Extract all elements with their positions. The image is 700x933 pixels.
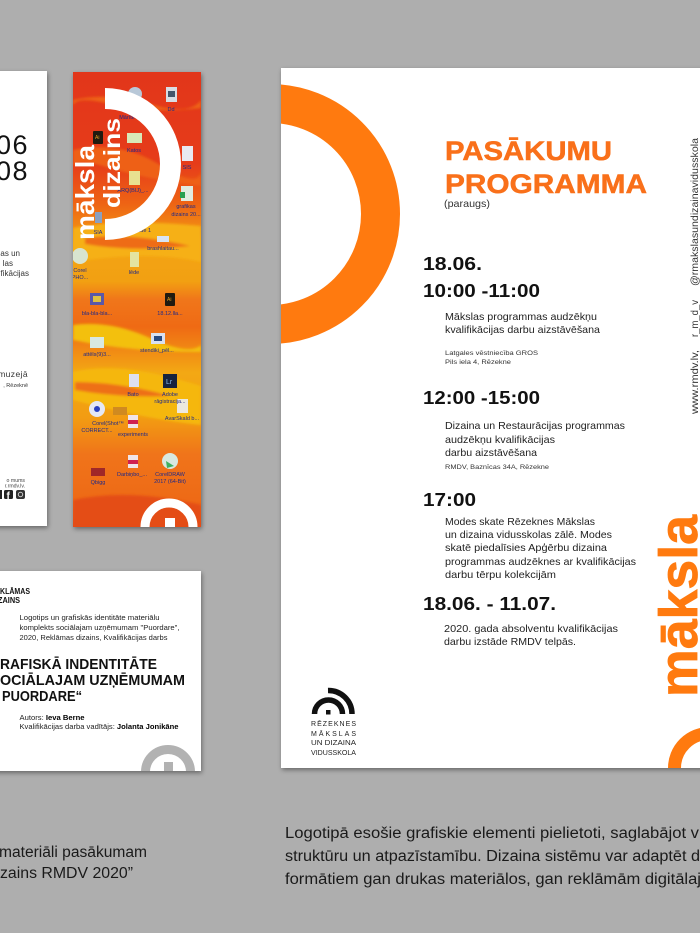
- description fragment: fikācijas: [1, 269, 29, 278]
- panel: event programme poster: [280, 68, 700, 772]
- first venue: [446, 350, 538, 365]
- third event: [445, 516, 636, 581]
- second event: darbu aizstāvēšana: [445, 447, 537, 459]
- first event: [446, 312, 600, 335]
- desktop icon labels: AvarSkald b...: [165, 416, 200, 422]
- panel: grey thesis card: [0, 571, 201, 794]
- logo text: MĀKSLAS: [311, 730, 356, 738]
- desktop icon labels: 18.12.lla...: [157, 311, 183, 317]
- exhibition dates: 18.06. - 11.07.: [423, 594, 556, 614]
- wordmark: māksla dizains: [75, 119, 120, 238]
- date and first time: [424, 257, 540, 297]
- title: [446, 137, 647, 194]
- date and first time: 18.06.: [423, 254, 482, 274]
- contact fragment: o mums: [7, 478, 25, 484]
- work description: 2020, Reklāmas dizains, Kvalifikācijas darbs: [20, 633, 168, 642]
- desktop icons: [72, 87, 193, 476]
- description fragment: [0, 249, 29, 278]
- third time: 17:00: [423, 490, 476, 510]
- date and first time: 10:00 -11:00: [423, 281, 540, 301]
- panel: left poster card: [0, 71, 47, 526]
- desktop icons: Ai: [167, 297, 171, 303]
- desktop icon labels: Darbiņbo_...: [117, 472, 147, 478]
- logo text: UN DIZAINA: [311, 740, 356, 747]
- icon: bottom ring: [140, 498, 198, 527]
- desktop icon labels: 2017 (64-Bit): [154, 479, 186, 485]
- desktop icon labels: CORRECT...: [81, 428, 113, 434]
- caption: logo usage: Logotipā esošie grafiskie elementi pielietoti, saglabājot v: [285, 825, 699, 842]
- second event: [445, 422, 625, 456]
- second venue: RMDV, Baznīcas 34A, Rēzekne: [445, 464, 549, 471]
- desktop icon labels: Katos: [127, 148, 141, 154]
- desktop icon labels: Qbigg: [91, 480, 105, 486]
- credits: Kvalifikācijas darba vadītājs: Jolanta Jonikāne: [20, 722, 178, 731]
- desktop icon labels: stendiki_pēl...: [140, 348, 174, 354]
- desktop icon labels: bla-bla-bla...: [82, 311, 113, 317]
- desktop icon labels: dizains 20...: [171, 212, 201, 218]
- first event: kvalifikācijas darbu aizstāvēšana: [445, 324, 600, 336]
- icon: social media: f: [6, 491, 10, 502]
- vertical contact line: [690, 138, 700, 414]
- contact fragment: [5, 478, 25, 490]
- desktop icon labels: CorelDRAW: [155, 472, 186, 478]
- white half ring: [105, 88, 181, 240]
- wordmark: māksla dizains: dizains: [99, 118, 125, 208]
- exhibition text: [444, 623, 618, 648]
- credits: [20, 715, 178, 730]
- work title: [0, 656, 185, 705]
- desktop icon labels: Bato: [127, 392, 139, 398]
- dates: [0, 130, 29, 186]
- venue fragment: [0, 369, 28, 389]
- desktop icon labels: PHO...: [72, 275, 89, 281]
- icon: logo arcs: [314, 690, 352, 714]
- desktop icon labels: Corel(Shot™: [92, 421, 124, 427]
- caption: logo usage: formātiem gan drukas materiālos, gan reklāmām digitālaj: [285, 871, 700, 888]
- title: PASĀKUMU: [445, 136, 612, 166]
- desktop icon labels: grafikas: [176, 204, 196, 210]
- third event: skatē piedalīsies Apģērbu dizaina: [445, 541, 607, 554]
- desktop icon labels: Corel: [73, 268, 87, 274]
- work description: Logotips un grafiskās identitāte materiālu: [20, 613, 160, 622]
- venue fragment: , Rēzeknē: [3, 383, 28, 389]
- caption: logo usage: [285, 825, 700, 888]
- desktop icon labels: Adobe: [162, 392, 178, 398]
- desktop icon labels: attēls(9)3...: [83, 352, 111, 358]
- caption: left materials: [0, 844, 147, 882]
- panel: orange bookmark: [70, 72, 201, 551]
- category heading: KLĀMAS: [0, 587, 31, 596]
- first venue: Pils iela 4, Rēzekne: [445, 359, 511, 366]
- icon: social media: [0, 490, 25, 502]
- first venue: Latgales vēstniecība GROS: [445, 350, 539, 357]
- desktop icon labels: ARQ(BIJ)_...: [117, 188, 149, 194]
- desktop icon labels: lēde: [129, 270, 139, 276]
- desktop icon labels: SIA: [94, 230, 103, 236]
- third event: Modes skate Rēzeknes Mākslas: [445, 516, 595, 528]
- painted background: [73, 72, 201, 527]
- work title: OCIĀLAJAM UZŅĒMUMAM: [0, 672, 185, 689]
- second event: audzēkņu kvalifikācijas: [445, 434, 555, 446]
- category heading: [0, 587, 30, 603]
- desktop icons: Lr: [166, 379, 173, 386]
- desktop icon labels: [72, 107, 201, 486]
- caption: logo usage: struktūru un atpazīstamību. Dizaina sistēmu var adaptēt d: [285, 848, 700, 865]
- third event: programmas audzēknes ar kvalifikācijas: [445, 556, 636, 568]
- orange bottom ring: [668, 728, 700, 768]
- third event: un dizaina vidusskolas zālē. Modes: [445, 529, 612, 541]
- logo text: RĒZEKNES: [311, 720, 356, 728]
- desktop icon labels: SIS: [183, 165, 192, 171]
- desktop icon labels: rāgistracija...: [154, 399, 186, 405]
- description fragment: las: [3, 259, 13, 268]
- exhibition text: darbu izstāde RMDV telpās.: [444, 636, 576, 648]
- desktop icons: Ai: [95, 135, 99, 141]
- work description: komplekts sociālajam uzņēmumam "Puordare",: [20, 623, 180, 632]
- orange ring: [281, 84, 400, 344]
- contact fragment: r.rmdv.lv.: [5, 484, 25, 490]
- logo text: VIDUSSKOLA: [311, 750, 356, 757]
- title: PROGRAMMA: [445, 169, 647, 199]
- work title: PUORDARE“: [2, 688, 82, 705]
- wordmark: māksla dizains: māksla: [70, 144, 100, 240]
- third event: darbu tērpu kolekcijām: [445, 569, 556, 581]
- second time: 12:00 -15:00: [423, 388, 540, 408]
- caption: left materials: zains RMDV 2020”: [0, 865, 133, 882]
- credits: Autors: Ieva Berne: [20, 713, 84, 722]
- caption: left materials: materiāli pasākumam: [0, 844, 147, 861]
- description fragment: as un: [0, 249, 20, 258]
- logo text: [311, 720, 356, 757]
- desktop icon labels: experiments: [118, 432, 148, 438]
- icon: grey ring: [141, 745, 195, 771]
- work title: RAFISKĀ INDENTITĀTE: [0, 656, 157, 673]
- desktop icon labels: Dd: [167, 107, 175, 113]
- school logo: [311, 690, 356, 757]
- work description: [20, 613, 180, 642]
- exhibition text: 2020. gada absolventu kvalifikācijas: [444, 623, 618, 635]
- desktop icon labels: Mārīte: [119, 115, 135, 121]
- desktop icon labels: brashlaitau...: [147, 246, 179, 252]
- second event: Dizaina un Restaurācijas programmas: [445, 420, 625, 432]
- first event: Mākslas programmas audzēkņu: [445, 311, 597, 323]
- desktop icon labels: izstāde 1: [129, 228, 151, 234]
- subtitle: (paraugs): [444, 198, 490, 210]
